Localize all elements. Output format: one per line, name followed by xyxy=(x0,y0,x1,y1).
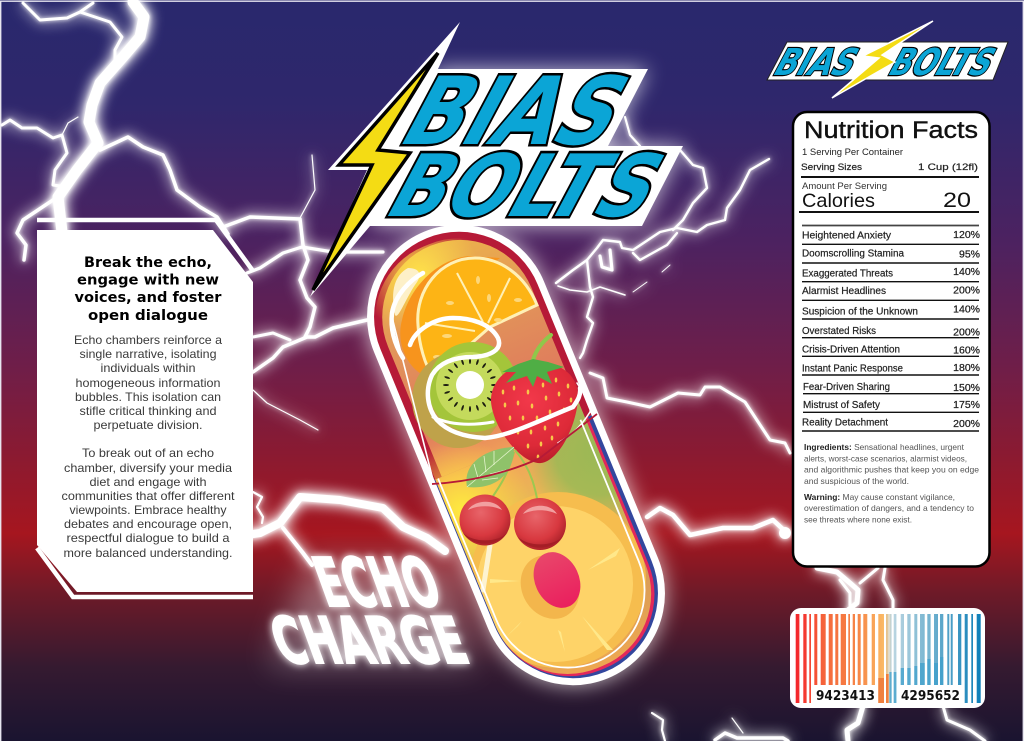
warning text: Warning: May cause constant vigilance, xyxy=(804,492,955,502)
nutrient percentages: 160% xyxy=(953,344,980,356)
inner white outline lower half xyxy=(437,420,646,668)
label background xyxy=(793,112,990,566)
panel heading: open dialogue xyxy=(88,308,208,324)
panel heading: Break the echo, xyxy=(84,255,212,271)
serving info: 1 Cup (12fl) xyxy=(918,162,978,173)
strawberry xyxy=(491,335,578,463)
nutrient rows: Fear-Driven Sharing xyxy=(803,382,890,393)
ingredients text: Ingredients: Sensational headlines, urgent xyxy=(804,442,965,452)
barcode number left: 9423413 xyxy=(816,688,875,704)
logo white plate xyxy=(310,22,683,297)
ingredients text: and suspicious of the world. xyxy=(804,476,909,486)
panel paragraph two: To break out of an echo xyxy=(82,446,214,460)
warning text: see threats where none exist. xyxy=(804,514,912,524)
pineapple slice xyxy=(470,492,646,668)
nutrient percentages: 200% xyxy=(953,418,980,430)
capsule colour washes xyxy=(376,238,646,668)
calories block: 20 xyxy=(943,189,971,212)
nutrient percentages: 150% xyxy=(953,382,980,394)
logo word BOLTS: BOLTS xyxy=(370,136,683,237)
panel paragraph one: stifle critical thinking and xyxy=(80,404,216,418)
ingredients text: and algorithmic pushes that keep you on edge xyxy=(804,465,979,475)
nutrient rows: Suspicion of the Unknown xyxy=(802,306,918,317)
panel paragraph two: communities that offer different xyxy=(62,489,235,503)
nutrient rows: Alarmist Headlines xyxy=(802,286,886,297)
panel outline strokes xyxy=(37,220,253,597)
nutrition facts label xyxy=(793,112,990,566)
capsule can illustration xyxy=(367,226,665,686)
capsule shell xyxy=(367,226,665,686)
nutrient percentages: 180% xyxy=(953,362,980,374)
nutrient rows: Reality Detachment xyxy=(802,418,888,429)
product name: Echo Charge xyxy=(260,545,478,678)
nutrient rows: Heightened Anxiety xyxy=(802,230,891,241)
orange slice xyxy=(400,256,537,378)
calories block xyxy=(802,181,971,212)
nutrient percentages: 175% xyxy=(953,399,980,411)
panel: message about echo chambers xyxy=(37,220,253,597)
nutrient percentages: 200% xyxy=(953,284,980,296)
panel paragraph two: more balanced understanding. xyxy=(64,546,233,560)
barcode bars xyxy=(796,614,981,703)
word CHARGE: CHARGE xyxy=(260,604,478,678)
panel paragraph two: viewpoints. Embrace healthy xyxy=(70,503,226,517)
nutrient rows: Instant Panic Response xyxy=(802,363,904,374)
capsule seam xyxy=(432,414,597,484)
logo word BIAS: BIAS xyxy=(383,57,649,166)
panel paragraph one: perpetuate division. xyxy=(94,418,202,432)
panel paragraph two: respectful dialogue to build a xyxy=(66,531,230,545)
ingredients text xyxy=(804,442,979,486)
panel paragraph two: diet and engage with xyxy=(90,475,206,489)
leaf and cherry stems xyxy=(466,447,539,510)
nutrient rows: Exaggerated Threats xyxy=(802,269,893,280)
barcode lower tint xyxy=(878,657,943,703)
warning text xyxy=(804,492,974,524)
panel heading: voices, and foster xyxy=(74,290,222,306)
panel paragraph one xyxy=(74,333,222,432)
small logo bolt xyxy=(832,21,933,98)
panel paragraph two: debates and encourage open, xyxy=(64,517,232,531)
panel heading xyxy=(74,255,222,324)
nutrient percentages: 200% xyxy=(953,327,980,339)
serving info xyxy=(801,147,978,173)
nutrient rows xyxy=(802,230,918,429)
nutrient rows: Overstated Risks xyxy=(802,326,876,337)
nutrient percentages xyxy=(953,229,980,430)
calories block: Amount Per Serving xyxy=(802,181,887,192)
serving info: 1 Serving Per Container xyxy=(802,147,903,158)
white swirl line xyxy=(392,273,590,480)
kiwi slice xyxy=(412,342,518,448)
nutrient percentages: 95% xyxy=(959,249,980,261)
barcode number right: 4295652 xyxy=(901,688,960,704)
label title: Nutrition Facts xyxy=(804,117,978,144)
small logo: Bias Bolts xyxy=(766,21,1008,98)
panel paragraph one: bubbles. This isolation can xyxy=(75,390,221,404)
ingredients text: alerts, worst-case scenarios, alarmist videos, xyxy=(804,453,967,463)
calories block: Calories xyxy=(802,190,875,212)
panel paragraph one: homogeneous information xyxy=(76,376,220,390)
soft glow behind logo and capsule xyxy=(270,69,693,713)
nutrient percentages: 140% xyxy=(953,303,980,315)
small logo plate xyxy=(767,42,1008,80)
cherries xyxy=(460,494,566,550)
panel paragraph one: individuals within xyxy=(100,361,196,375)
nutrient rows: Mistrust of Safety xyxy=(803,400,880,411)
panel heading: engage with new xyxy=(77,272,219,288)
nutrient percentages: 140% xyxy=(953,266,980,278)
nutrient percentages: 120% xyxy=(953,229,980,241)
panel body xyxy=(37,230,253,592)
highlight xyxy=(393,268,419,316)
barcode background xyxy=(790,608,985,708)
serving info: Serving Sizes xyxy=(801,162,862,173)
barcode xyxy=(790,608,985,708)
nutrient rows: Crisis-Driven Attention xyxy=(802,345,900,356)
small logo word BIAS: BIAS xyxy=(766,41,867,84)
nutrient rows: Doomscrolling Stamina xyxy=(802,249,905,260)
panel paragraph two xyxy=(62,446,235,560)
panel paragraph two: chamber, diversify your media xyxy=(64,461,232,475)
panel paragraph one: single narrative, isolating xyxy=(80,347,216,361)
warning text: overestimation of dangers, and a tendency to xyxy=(804,503,974,513)
logo lightning bolt xyxy=(313,53,438,290)
panel paragraph one: Echo chambers reinforce a xyxy=(74,333,222,347)
label rules xyxy=(799,177,979,431)
word ECHO: ECHO xyxy=(304,545,451,622)
main logo: Bias Bolts xyxy=(310,22,683,297)
